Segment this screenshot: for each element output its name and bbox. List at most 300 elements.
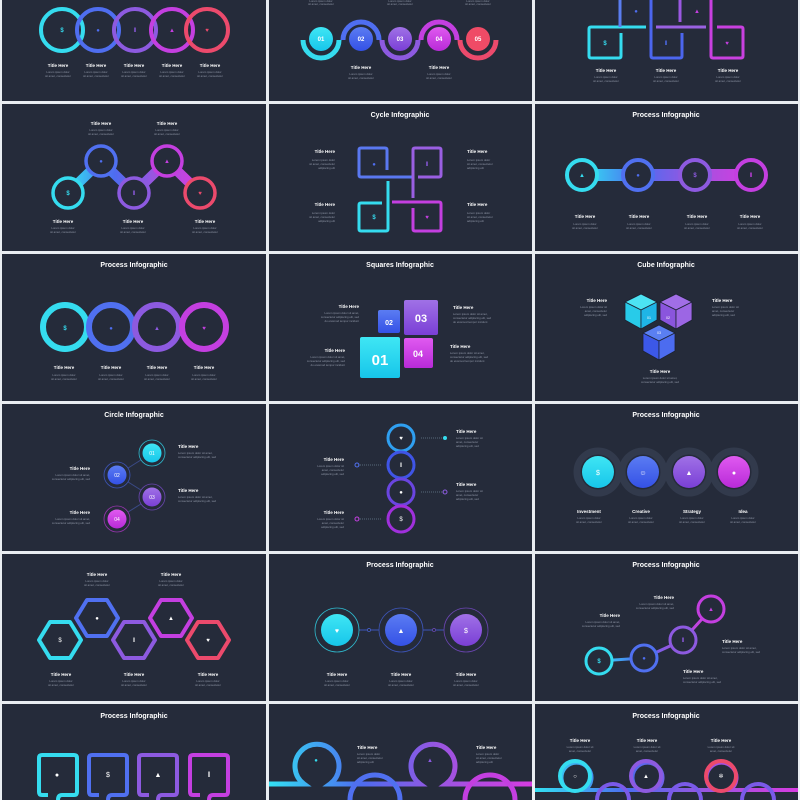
panel: diagonal steps: Title Here bbox=[722, 639, 743, 644]
panel: cube infographic bbox=[580, 262, 739, 384]
panel: looping ribbon: ▲ bbox=[427, 758, 433, 764]
panel: process chain: Title Here bbox=[629, 214, 650, 219]
panel: three circles process: Title Here bbox=[456, 672, 477, 677]
panel: wave circles: $ bbox=[66, 191, 70, 197]
panel: vertical chain: ● bbox=[399, 490, 403, 496]
panel: diagonal steps: Process Infographic bbox=[632, 562, 700, 569]
panel: interlocking squares bbox=[589, 0, 743, 83]
panel: hexagons: Lorem ipsum dolor bbox=[49, 679, 73, 683]
panel: thick rings process: Lorem ipsum dolor bbox=[145, 373, 169, 377]
panel: diagonal steps: consectetur adipiscing elit, sed bbox=[683, 680, 722, 684]
panel: hexagons: sit amet, consectetur bbox=[195, 683, 221, 687]
panel: diagonal steps: ▲ bbox=[708, 607, 714, 613]
panel: squares infographic: do eiusmod tempor incidunt bbox=[325, 319, 359, 323]
panel: looping ribbon: Title Here bbox=[476, 745, 497, 750]
panel: bottom-right ribbon: Title Here bbox=[711, 738, 732, 743]
panel: five linked rings: $ bbox=[60, 28, 64, 34]
panel: hexagons: sit amet, consectetur bbox=[84, 583, 110, 587]
panel: five linked rings: Lorem ipsum dolor bbox=[198, 70, 222, 74]
panel: squares infographic: Lorem ipsum dolor sit amet, bbox=[453, 312, 488, 316]
panel: cycle infographic: adipiscing elit bbox=[318, 166, 335, 170]
panel: vertical chain: amet, consectetur bbox=[456, 493, 478, 497]
panel: bottom-right ribbon: ○ bbox=[573, 774, 577, 780]
panel: vertical chain: amet, consectetur bbox=[456, 440, 478, 444]
panel: bottom-right ribbon: amet, consectetur bbox=[569, 749, 591, 753]
panel: squares infographic: consectetur adipiscing elit, sed bbox=[321, 315, 359, 319]
panel: squares infographic: Title Here bbox=[339, 304, 359, 309]
panel: squares infographic: do eiusmod tempor incidunt bbox=[311, 363, 345, 367]
panel: five linked rings: Lorem ipsum dolor bbox=[46, 70, 70, 74]
panel: cycle infographic: adipiscing elit bbox=[318, 219, 335, 223]
panel: diagonal steps: Title Here bbox=[683, 669, 704, 674]
panel: numbered circles with arcs: 02 bbox=[358, 37, 365, 43]
panel: five linked rings: Title Here bbox=[162, 63, 183, 68]
panel: squares infographic: Lorem ipsum dolor sit amet, bbox=[450, 351, 485, 355]
panel: five linked rings: Title Here bbox=[86, 63, 107, 68]
panel: diagonal steps: consectetur adipiscing elit, sed bbox=[582, 624, 620, 628]
panel: cycle infographic: sit amet, consectetur bbox=[467, 162, 493, 166]
panel: vertical chain: adipiscing elit, sed bbox=[456, 444, 479, 448]
panel: looping ribbon: sit amet, consectetur bbox=[357, 756, 383, 760]
panel: circle infographic: consectetur adipiscing elit, sed bbox=[178, 499, 217, 503]
panel: interlocking squares: sit amet, consectetur bbox=[593, 79, 619, 83]
panel: vertical chain: Title Here bbox=[324, 510, 344, 515]
panel: numbered circles with arcs: sit amet, consectetur bbox=[308, 2, 334, 6]
panel: numbered circles with arcs: 01 bbox=[318, 37, 325, 43]
panel: five linked rings: ǁ bbox=[134, 28, 136, 34]
panel: wave circles: Lorem ipsum dolor bbox=[89, 128, 113, 132]
panel: bottom-right ribbon: Lorem ipsum dolor sit bbox=[634, 745, 661, 749]
panel: wave circles: ● bbox=[99, 159, 103, 165]
panel: bottom-right ribbon: Title Here bbox=[570, 738, 591, 743]
panel: interlocking squares: Lorem ipsum dolor bbox=[594, 75, 618, 79]
panel: investment process: sit amet, consectetur bbox=[679, 520, 705, 524]
panel: investment process: Lorem ipsum dolor bbox=[680, 516, 704, 520]
panel: looping ribbon: adipiscing elit bbox=[357, 760, 374, 764]
panel: hexagons: ǁ bbox=[133, 638, 135, 644]
panel: looping ribbon: sit amet, consectetur bbox=[476, 756, 502, 760]
panel: diagonal steps: Lorem ipsum dolor sit amet, bbox=[683, 676, 718, 680]
panel: looping ribbon: Lorem ipsum dolor bbox=[476, 752, 499, 756]
panel: cube infographic: Lorem ipsum dolor sit amet, bbox=[643, 376, 677, 380]
panel: three circles process: sit amet, consectetur bbox=[324, 683, 350, 687]
panel: cube infographic: 02 bbox=[666, 316, 670, 320]
panel: process chain: Lorem ipsum dolor bbox=[573, 222, 597, 226]
panel: process chain: sit amet, consectetur bbox=[626, 226, 652, 230]
panel: hexagons: ♥ bbox=[206, 638, 210, 644]
panel: process chain: ● bbox=[636, 173, 640, 179]
panel: cycle infographic: Lorem ipsum dolor bbox=[467, 211, 490, 215]
panel: cycle infographic: sit amet, consectetur bbox=[309, 215, 335, 219]
panel: wave circles: Title Here bbox=[91, 121, 112, 126]
panel: vertical chain: Title Here bbox=[456, 429, 477, 434]
panel: interlocking squares: ♥ bbox=[725, 41, 729, 47]
panel: cycle infographic: Lorem ipsum dolor bbox=[312, 211, 335, 215]
panel: cube infographic: consectetur adipiscing elit, sed bbox=[641, 380, 679, 384]
panel: five linked rings: sit amet, consectetur bbox=[197, 74, 223, 78]
panel: hexagons: ● bbox=[95, 616, 99, 622]
panel: process chain: Lorem ipsum dolor bbox=[627, 222, 651, 226]
panel: vertical chain: adipiscing elit, sed bbox=[321, 525, 344, 529]
panel: interlocking squares: sit amet, consectetur bbox=[715, 79, 741, 83]
panel: three circles process: ♥ bbox=[335, 628, 339, 635]
panel: diagonal steps: Lorem ipsum dolor sit amet, bbox=[585, 620, 620, 624]
panel: process chain: ▲ bbox=[579, 173, 585, 179]
panel: process chain: Title Here bbox=[740, 214, 761, 219]
panel: looping ribbon bbox=[269, 744, 532, 800]
panel: hexagons: Lorem ipsum dolor bbox=[85, 579, 109, 583]
panel: investment process: Lorem ipsum dolor bbox=[731, 516, 755, 520]
panel: numbered circles with arcs: sit amet, consectetur bbox=[387, 2, 413, 6]
panel: three circles process: Lorem ipsum dolor bbox=[389, 679, 413, 683]
panel: squares infographic: Lorem ipsum dolor sit amet, bbox=[324, 311, 359, 315]
panel: wave circles: Lorem ipsum dolor bbox=[51, 226, 75, 230]
panel: process chain: Process Infographic bbox=[632, 112, 700, 119]
panel: squares infographic: 01 bbox=[372, 352, 388, 369]
panel: hexagons: Lorem ipsum dolor bbox=[196, 679, 220, 683]
panel: thick rings process: ♥ bbox=[202, 326, 206, 332]
panel: vertical chain: Title Here bbox=[324, 457, 344, 462]
panel: vertical chain: Lorem ipsum dolor sit bbox=[456, 436, 483, 440]
panel: rounded square pins: Process Infographic bbox=[100, 713, 168, 720]
panel: vertical chain: $ bbox=[399, 517, 403, 523]
panel: bottom-right ribbon: Title Here bbox=[637, 738, 658, 743]
panel: three circles process: ▲ bbox=[398, 628, 404, 635]
panel: process chain: sit amet, consectetur bbox=[572, 226, 598, 230]
panel: vertical chain: Title Here bbox=[456, 482, 477, 487]
panel: cycle infographic: adipiscing elit bbox=[467, 219, 484, 223]
panel: process chain: $ bbox=[693, 173, 697, 179]
panel: circle infographic bbox=[52, 412, 217, 532]
panel: five linked rings: ♥ bbox=[205, 28, 209, 34]
panel: five linked rings: Title Here bbox=[124, 63, 145, 68]
panel: cycle infographic: Title Here bbox=[315, 202, 335, 207]
panel: process chain: sit amet, consectetur bbox=[737, 226, 763, 230]
panel: cycle infographic: Title Here bbox=[467, 202, 488, 207]
panel: five linked rings: Lorem ipsum dolor bbox=[84, 70, 108, 74]
panel: investment process: ▲ bbox=[686, 470, 692, 477]
panel: numbered circles with arcs bbox=[303, 0, 496, 80]
panel: five linked rings: sit amet, consectetur bbox=[121, 74, 147, 78]
panel: vertical chain: adipiscing elit, sed bbox=[321, 472, 344, 476]
panel: diagonal steps: Lorem ipsum dolor sit amet, bbox=[639, 602, 674, 606]
panel: circle infographic: 02 bbox=[114, 473, 120, 479]
panel: interlocking squares: $ bbox=[603, 41, 607, 47]
panel: cycle infographic: Title Here bbox=[315, 149, 335, 154]
panel: investment process: Investment bbox=[577, 509, 601, 514]
panel: investment process: sit amet, consectetur bbox=[576, 520, 602, 524]
panel: interlocking squares: ▲ bbox=[694, 9, 700, 15]
panel: cube infographic: 01 bbox=[647, 316, 651, 320]
panel: wave circles: Title Here bbox=[157, 121, 178, 126]
panel: five linked rings: sit amet, consectetur bbox=[83, 74, 109, 78]
panel: numbered circles with arcs: 04 bbox=[436, 37, 443, 43]
panel: hexagons: Title Here bbox=[51, 672, 72, 677]
panel: rounded square pins: ▲ bbox=[155, 772, 161, 779]
panel: hexagons: $ bbox=[58, 638, 62, 644]
panel: circle infographic: Circle Infographic bbox=[104, 412, 164, 419]
panel: interlocking squares: Title Here bbox=[718, 68, 739, 73]
panel: thick rings process: Title Here bbox=[194, 365, 215, 370]
panel: three circles process: sit amet, consectetur bbox=[388, 683, 414, 687]
panel: thick rings process: Title Here bbox=[101, 365, 122, 370]
panel: hexagons: sit amet, consectetur bbox=[121, 683, 147, 687]
panel: five linked rings: sit amet, consectetur bbox=[159, 74, 185, 78]
panel: cycle infographic: sit amet, consectetur bbox=[467, 215, 493, 219]
panel: squares infographic: consectetur adipiscing elit, sed bbox=[307, 359, 345, 363]
panel: circle infographic: Title Here bbox=[70, 510, 90, 515]
panel: bottom-right ribbon bbox=[535, 713, 798, 800]
panel: circle infographic: Lorem ipsum dolor sit amet, bbox=[55, 517, 90, 521]
panel: rounded square pins: ● bbox=[55, 772, 59, 779]
panel: numbered circles with arcs: Lorem ipsum dolor bbox=[427, 72, 451, 76]
panel: hexagons bbox=[39, 572, 229, 687]
panel: circle infographic: Title Here bbox=[178, 444, 199, 449]
panel: three circles process: Title Here bbox=[327, 672, 348, 677]
panel: thick rings process: $ bbox=[63, 326, 67, 332]
panel: diagonal steps: ǁ bbox=[682, 638, 684, 644]
panel: thick rings process bbox=[43, 262, 226, 381]
panel: thick rings process: Process Infographic bbox=[100, 262, 168, 269]
panel: cube infographic: adipiscing elit, sed bbox=[584, 313, 607, 317]
panel: circle infographic: consectetur adipiscing elit, sed bbox=[178, 455, 217, 459]
panel: cube infographic: 03 bbox=[657, 331, 661, 335]
panel: looping ribbon: ● bbox=[314, 758, 318, 764]
panel: three circles process: Lorem ipsum dolor bbox=[325, 679, 349, 683]
panel: cube infographic: Title Here bbox=[712, 298, 733, 303]
panel: numbered circles with arcs: Lorem ipsum dolor bbox=[349, 72, 373, 76]
panel: numbered circles with arcs: sit amet, consectetur bbox=[426, 76, 452, 80]
panel: wave circles: Lorem ipsum dolor bbox=[121, 226, 145, 230]
panel: three circles process bbox=[315, 562, 488, 687]
panel: process chain bbox=[567, 112, 766, 230]
panel: cycle infographic: sit amet, consectetur bbox=[309, 162, 335, 166]
panel: vertical chain: Lorem ipsum dolor sit bbox=[317, 517, 344, 521]
panel: circle infographic: Lorem ipsum dolor sit amet, bbox=[178, 495, 213, 499]
panel: investment process: Strategy bbox=[683, 509, 701, 514]
panel: wave circles: sit amet, consectetur bbox=[154, 132, 180, 136]
panel: squares infographic bbox=[307, 262, 492, 378]
panel: looping ribbon: Lorem ipsum dolor bbox=[357, 752, 380, 756]
panel: hexagons: sit amet, consectetur bbox=[48, 683, 74, 687]
panel: wave circles: sit amet, consectetur bbox=[88, 132, 114, 136]
panel: cycle infographic: ● bbox=[372, 162, 376, 168]
panel: vertical chain bbox=[317, 425, 483, 532]
panel: thick rings process: Title Here bbox=[147, 365, 168, 370]
panel: three circles process: Lorem ipsum dolor bbox=[454, 679, 478, 683]
panel: investment process: sit amet, consectetur bbox=[628, 520, 654, 524]
panel: investment process: $ bbox=[596, 470, 600, 477]
panel: five linked rings: Title Here bbox=[200, 63, 221, 68]
panel: squares infographic: 04 bbox=[413, 349, 423, 359]
panel: vertical chain: adipiscing elit, sed bbox=[456, 497, 479, 501]
panel: circle infographic: 03 bbox=[149, 495, 155, 501]
panel: numbered circles with arcs: Title Here bbox=[351, 65, 372, 70]
panel: bottom-right ribbon: ✲ bbox=[718, 773, 724, 780]
panel: interlocking squares: sit amet, consectetur bbox=[653, 79, 679, 83]
panel: squares infographic: Title Here bbox=[450, 344, 471, 349]
panel: investment process: Idea bbox=[738, 509, 748, 514]
panel: process chain: Lorem ipsum dolor bbox=[685, 222, 709, 226]
panel: looping ribbon: adipiscing elit bbox=[476, 760, 493, 764]
panel: hexagons: Lorem ipsum dolor bbox=[159, 579, 183, 583]
panel: investment process bbox=[576, 412, 756, 524]
panel: cycle infographic: $ bbox=[372, 215, 376, 221]
panel: thick rings process: sit amet, consectetur bbox=[191, 377, 217, 381]
panel: circle infographic: Title Here bbox=[178, 488, 199, 493]
panel: numbered circles with arcs: sit amet, consectetur bbox=[465, 2, 491, 6]
panel: diagonal steps: consectetur adipiscing elit, sed bbox=[722, 650, 761, 654]
panel: thick rings process: Title Here bbox=[54, 365, 75, 370]
panel: interlocking squares: ● bbox=[634, 9, 638, 15]
panel: three circles process: sit amet, consectetur bbox=[453, 683, 479, 687]
panel: five linked rings: Lorem ipsum dolor bbox=[122, 70, 146, 74]
panel: three circles process: Process Infographic bbox=[366, 562, 434, 569]
panel: vertical chain: amet, consectetur bbox=[322, 521, 344, 525]
panel: process chain: Title Here bbox=[575, 214, 596, 219]
panel: hexagons: Title Here bbox=[198, 672, 219, 677]
panel: interlocking squares: Title Here bbox=[656, 68, 677, 73]
panel: bottom-right ribbon: Lorem ipsum dolor sit bbox=[708, 745, 735, 749]
panel: wave circles: ǁ bbox=[132, 191, 136, 197]
panel: cube infographic: amet, consectetur bbox=[712, 309, 734, 313]
panel: squares infographic: consectetur adipiscing elit, sed bbox=[453, 316, 492, 320]
panel: five linked rings: ▲ bbox=[169, 28, 175, 34]
panel: thick rings process: ● bbox=[109, 326, 113, 332]
panel: circle infographic: 04 bbox=[114, 517, 120, 523]
panel: diagonal steps: ● bbox=[642, 656, 646, 662]
panel: investment process: ● bbox=[732, 470, 736, 477]
panel: process chain: Title Here bbox=[687, 214, 708, 219]
panel: circle infographic: Lorem ipsum dolor sit amet, bbox=[178, 451, 213, 455]
panel: five linked rings: Title Here bbox=[48, 63, 69, 68]
panel: interlocking squares: Lorem ipsum dolor bbox=[716, 75, 740, 79]
panel: vertical chain: Lorem ipsum dolor sit bbox=[456, 489, 483, 493]
panel: cycle infographic: ǁ bbox=[426, 162, 428, 168]
panel: interlocking squares: Lorem ipsum dolor bbox=[654, 75, 678, 79]
panel: rounded square pins: $ bbox=[106, 772, 110, 779]
panel: squares infographic: 03 bbox=[415, 313, 427, 325]
panel: thick rings process: sit amet, consectetur bbox=[98, 377, 124, 381]
panel: wave circles: sit amet, consectetur bbox=[50, 230, 76, 234]
panel: investment process: Lorem ipsum dolor bbox=[577, 516, 601, 520]
panel: thick rings process: Lorem ipsum dolor bbox=[99, 373, 123, 377]
panel: wave circles: Title Here bbox=[123, 219, 144, 224]
panel: thick rings process: Lorem ipsum dolor bbox=[192, 373, 216, 377]
panel: bottom-right ribbon: amet, consectetur bbox=[636, 749, 658, 753]
panel: wave circles: Lorem ipsum dolor bbox=[193, 226, 217, 230]
panel: cube infographic: Cube Infographic bbox=[637, 262, 695, 269]
panel: process chain: Lorem ipsum dolor bbox=[738, 222, 762, 226]
panel: diagonal steps: consectetur adipiscing elit, sed bbox=[636, 606, 674, 610]
panel: diagonal steps: Lorem ipsum dolor sit amet, bbox=[722, 646, 757, 650]
panel: bottom-right ribbon: ▲ bbox=[643, 774, 649, 780]
panel: rounded square pins: ǁ bbox=[208, 772, 211, 779]
panel: numbered circles with arcs: Title Here bbox=[429, 65, 450, 70]
panel: investment process: Creative bbox=[632, 509, 650, 514]
panel: cube infographic: amet, consectetur bbox=[585, 309, 607, 313]
panel: wave circles: ▲ bbox=[164, 159, 170, 165]
panel: interlocking squares: Title Here bbox=[596, 68, 617, 73]
panel: three circles process: Title Here bbox=[391, 672, 412, 677]
panel: squares infographic: consectetur adipiscing elit, sed bbox=[450, 355, 489, 359]
panel: hexagons: ▲ bbox=[168, 616, 174, 622]
panel: squares infographic: Title Here bbox=[453, 305, 474, 310]
panel: investment process: sit amet, consectetur bbox=[730, 520, 756, 524]
panel: cube infographic: Title Here bbox=[650, 369, 671, 374]
panel: hexagons: Title Here bbox=[124, 672, 145, 677]
panel: thick rings process: Lorem ipsum dolor bbox=[52, 373, 76, 377]
panel: squares infographic: do eiusmod tempor incidunt bbox=[453, 320, 488, 324]
panel: numbered circles with arcs: 05 bbox=[475, 37, 482, 43]
panel: vertical chain: ♥ bbox=[399, 436, 403, 442]
panel: circle infographic: Title Here bbox=[70, 466, 90, 471]
panel: vertical chain: Lorem ipsum dolor sit bbox=[317, 464, 344, 468]
panel: three circles process: $ bbox=[464, 628, 468, 635]
panel: numbered circles with arcs: sit amet, consectetur bbox=[348, 76, 374, 80]
panel: cycle infographic: Lorem ipsum dolor bbox=[467, 158, 490, 162]
panel: bottom-right ribbon: Lorem ipsum dolor sit bbox=[567, 745, 594, 749]
panel: diagonal steps: Title Here bbox=[600, 613, 620, 618]
panel: wave circles: Lorem ipsum dolor bbox=[155, 128, 179, 132]
panel: cube infographic: Lorem ipsum dolor sit bbox=[580, 305, 607, 309]
panel: thick rings process: sit amet, consectetur bbox=[144, 377, 170, 381]
panel: hexagons: Title Here bbox=[161, 572, 182, 577]
panel: hexagons: sit amet, consectetur bbox=[158, 583, 184, 587]
panel: five linked rings bbox=[41, 9, 228, 78]
panel: investment process: Process Infographic bbox=[632, 412, 700, 419]
panel: circle infographic: consectetur adipiscing elit, sed bbox=[52, 477, 90, 481]
panel: interlocking squares: ǁ bbox=[664, 41, 668, 47]
panel: bottom-right ribbon: Process Infographic bbox=[632, 713, 700, 720]
panel: cube infographic: Title Here bbox=[587, 298, 607, 303]
panel: wave circles: sit amet, consectetur bbox=[120, 230, 146, 234]
panel: wave circles: sit amet, consectetur bbox=[192, 230, 218, 234]
panel: five linked rings: ● bbox=[96, 28, 100, 34]
panel: squares infographic: Title Here bbox=[325, 348, 345, 353]
panel: hexagons: Lorem ipsum dolor bbox=[122, 679, 146, 683]
panel: thick rings process: sit amet, consectetur bbox=[51, 377, 77, 381]
panel: five linked rings: Lorem ipsum dolor bbox=[160, 70, 184, 74]
panel: investment process: ☺ bbox=[639, 470, 647, 477]
panel: wave circles bbox=[50, 121, 218, 234]
panel: squares infographic: 02 bbox=[385, 320, 393, 327]
panel: diagonal steps: $ bbox=[597, 659, 601, 665]
panel: vertical chain: ǁ bbox=[400, 463, 402, 469]
panel: wave circles: Title Here bbox=[195, 219, 216, 224]
panel: squares infographic: Squares Infographic bbox=[366, 262, 434, 269]
panel: bottom-right ribbon: amet, consectetur bbox=[710, 749, 732, 753]
panel: cube infographic: Lorem ipsum dolor sit bbox=[712, 305, 739, 309]
panel: diagonal steps: Title Here bbox=[654, 595, 674, 600]
panel: squares infographic: do eiusmod tempor incidunt bbox=[450, 359, 485, 363]
panel: cycle infographic: Cycle Infographic bbox=[371, 112, 429, 119]
panel: wave circles: ♥ bbox=[198, 191, 202, 197]
panel: vertical chain: amet, consectetur bbox=[322, 468, 344, 472]
panel: thick rings process: ▲ bbox=[154, 326, 160, 332]
panel: rounded square pins bbox=[39, 713, 228, 800]
panel: cycle infographic: ♥ bbox=[425, 215, 429, 221]
panel: cycle infographic: Lorem ipsum dolor bbox=[312, 158, 335, 162]
panel: hexagons: Title Here bbox=[87, 572, 108, 577]
panel: cycle infographic: adipiscing elit bbox=[467, 166, 484, 170]
panel: process chain: ǁ bbox=[750, 173, 752, 179]
panel: circle infographic: Lorem ipsum dolor sit amet, bbox=[55, 473, 90, 477]
panel: looping ribbon: Title Here bbox=[357, 745, 378, 750]
panel: circle infographic: 01 bbox=[149, 451, 155, 457]
panel: circle infographic: consectetur adipiscing elit, sed bbox=[52, 521, 90, 525]
panel: investment process: Lorem ipsum dolor bbox=[629, 516, 653, 520]
